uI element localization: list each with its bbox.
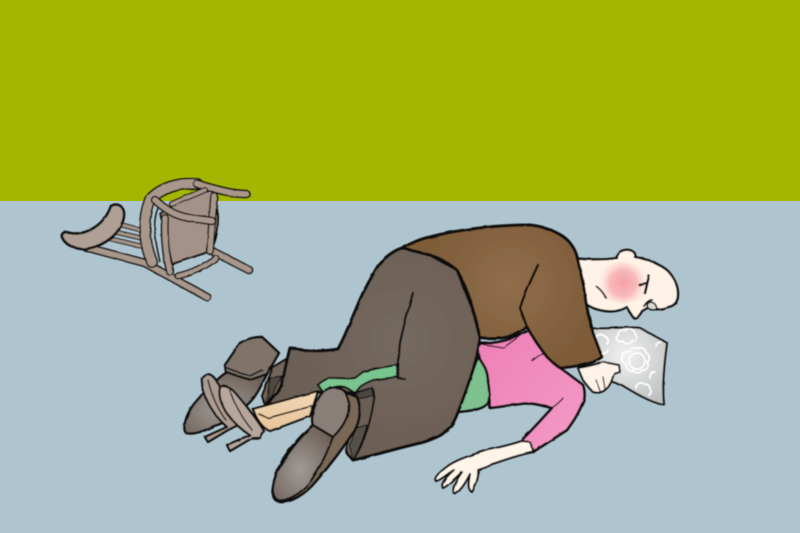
man: hand on pillow [578, 362, 620, 393]
man: eye and eyebrow [645, 276, 649, 293]
woman: rear heel shoe [202, 374, 240, 442]
man: back trouser cuff [262, 358, 288, 407]
chair short leg [210, 250, 249, 270]
man: red cheek [595, 262, 651, 304]
man: front trouser cuff [347, 388, 375, 460]
man: jacket sleeve fold [520, 265, 538, 327]
woman: pink top [477, 330, 584, 452]
chair stretcher [178, 258, 216, 276]
background: blue floor [0, 201, 800, 533]
woman: front heel shoe [219, 386, 264, 451]
chair long leg [85, 247, 207, 297]
chair top leg [197, 184, 246, 194]
background: green wall [0, 0, 800, 201]
woman: beige leg [253, 391, 318, 431]
man: back shoe [184, 337, 279, 434]
pillow flower pattern [596, 329, 661, 395]
woman: sleeve crease [478, 333, 563, 408]
chair backrest crescent [62, 205, 124, 249]
chair seat [160, 190, 218, 264]
man: head [570, 250, 678, 318]
pillow [584, 327, 667, 405]
woman: green skirt strip [318, 365, 398, 393]
man: jacket [402, 225, 602, 368]
chair inner leg [165, 218, 170, 272]
chair rear post [210, 196, 214, 251]
woman: forearm and hand [435, 441, 534, 494]
fallen chair [62, 184, 249, 297]
chair seat frame [145, 184, 197, 262]
woman: green skirt [458, 357, 490, 412]
man: trouser fold [398, 293, 413, 379]
chair spindles [107, 225, 145, 247]
man: trousers [266, 248, 480, 460]
chair top rail [155, 200, 212, 221]
man: ear crease [597, 287, 606, 298]
man: front shoe [273, 388, 360, 502]
